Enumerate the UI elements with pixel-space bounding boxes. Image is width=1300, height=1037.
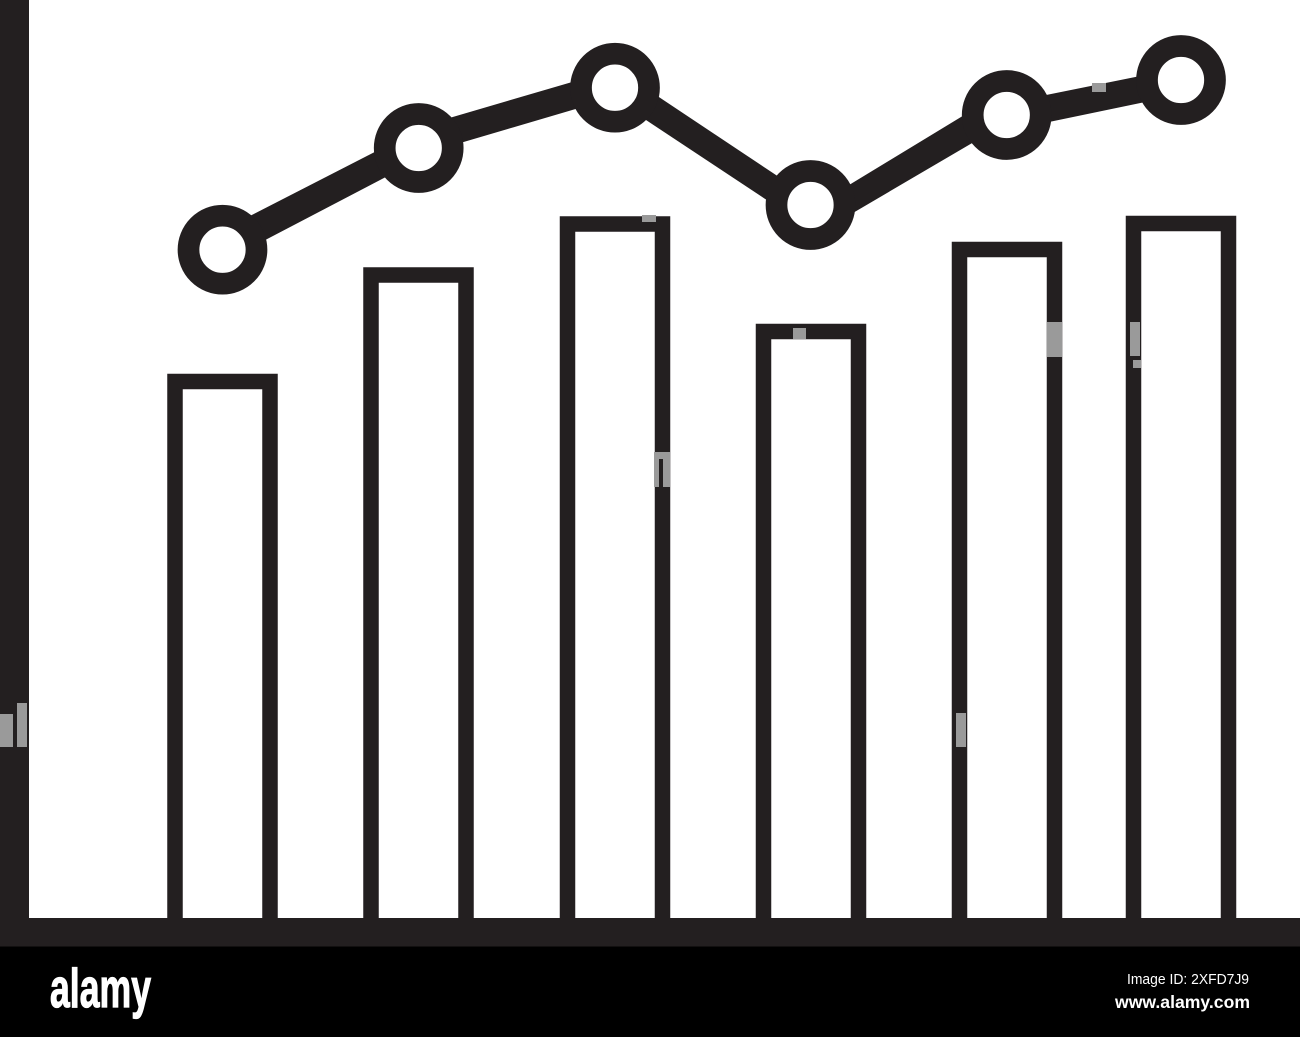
stock url: www.alamy.com xyxy=(1114,992,1250,1012)
watermark fragments xyxy=(0,83,1141,747)
alamy logo: alamy xyxy=(50,957,151,1019)
bars xyxy=(175,224,1228,942)
image id: Image ID: 2XFD7J9 xyxy=(1127,971,1249,988)
footer band xyxy=(0,946,1300,1037)
trend line with markers xyxy=(188,46,1215,284)
